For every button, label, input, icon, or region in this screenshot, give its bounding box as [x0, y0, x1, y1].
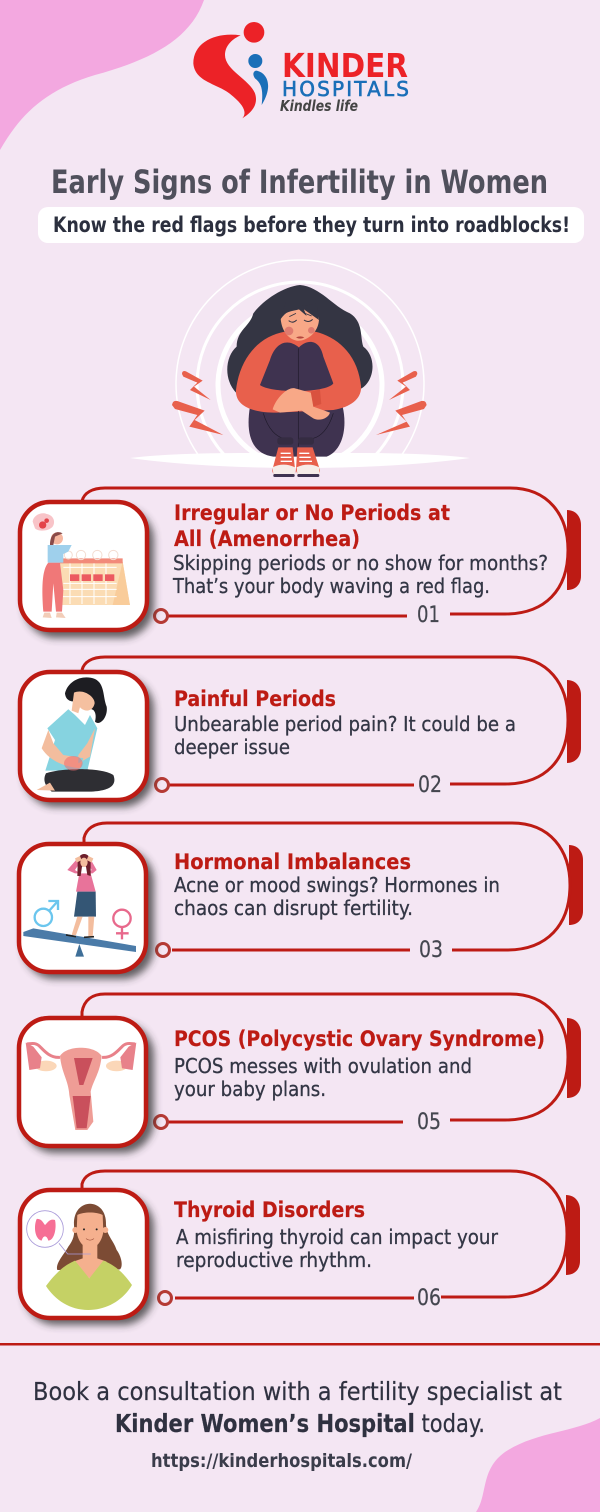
body line 1: Skipping periods or no show for months? [173, 551, 548, 575]
heading: Hormonal Imbalances [174, 850, 411, 874]
decorative blob: bottom right [476, 1418, 600, 1512]
panel: thyroid disorders [20, 1171, 580, 1325]
body line 1: Acne or mood swings? Hormones in [174, 873, 500, 897]
icon card [20, 672, 147, 800]
connector [82, 488, 568, 616]
body line 1: PCOS messes with ovulation and [174, 1054, 472, 1078]
hero illustration: distressed woman [131, 259, 468, 477]
heading: Irregular or No Periods at [174, 501, 450, 525]
side tab [569, 845, 583, 925]
body line 2: your baby plans. [174, 1077, 326, 1101]
icon card [19, 1018, 146, 1146]
panel: PCOS [19, 994, 581, 1153]
body line 2: That’s your body waving a red flag. [172, 574, 490, 598]
side tab [567, 680, 581, 763]
logo wordmark: KINDER [282, 46, 408, 85]
icon: hormonal balance seesaw [23, 854, 136, 957]
card shadow [24, 1195, 154, 1325]
connector [84, 823, 570, 950]
card shadow [24, 508, 154, 638]
icon card [20, 1190, 147, 1318]
body line 1: Unbearable period pain? It could be a [174, 712, 516, 736]
connector node [154, 1116, 168, 1128]
icon card [20, 502, 147, 630]
connector node [154, 610, 168, 622]
body line 2: chaos can disrupt fertility. [174, 896, 413, 920]
footer url: https://kinderhospitals.com/ [151, 1450, 412, 1472]
footer call to action line 2: Kinder Women’s Hospital today. [115, 1409, 485, 1438]
body line 1: A misfiring thyroid can impact your [176, 1225, 499, 1249]
number: 02 [418, 773, 442, 798]
logo tagline: Kindles life [280, 97, 358, 115]
card shadow [23, 849, 154, 979]
panel: irregular or no periods [20, 488, 581, 638]
icon: woman with thyroid [27, 1204, 132, 1310]
subtitle pill [38, 207, 584, 243]
logo mark [193, 22, 268, 118]
card shadow [23, 1023, 154, 1153]
heading: PCOS (Polycystic Ovary Syndrome) [174, 1027, 545, 1051]
side tab [567, 1018, 581, 1098]
body line 2: deeper issue [174, 735, 290, 759]
side tab [566, 1195, 580, 1275]
footer call to action line 1: Book a consultation with a fertility specialist at [33, 1377, 562, 1406]
connector node [156, 778, 168, 792]
icon: woman with calendar [33, 513, 130, 618]
number: 06 [417, 1286, 441, 1311]
number: 01 [417, 603, 440, 628]
logo [193, 22, 409, 118]
card shadow [24, 677, 154, 807]
heading: Painful Periods [174, 687, 336, 711]
connector [82, 657, 568, 785]
icon card [19, 844, 146, 972]
icon: uterus [26, 1043, 136, 1130]
heading line 2: All (Amenorrhea) [174, 527, 360, 551]
decorative blob: top left [0, 0, 204, 150]
icon: woman in pain [37, 677, 114, 792]
number: 05 [417, 1110, 441, 1135]
footer divider [0, 1343, 600, 1346]
connector node [156, 944, 170, 956]
side tab [567, 510, 581, 590]
heading: Thyroid Disorders [174, 1198, 365, 1222]
connector [82, 994, 568, 1122]
connector node [158, 1292, 172, 1304]
logo sub-wordmark: HOSPITALS [282, 77, 409, 101]
number: 03 [419, 938, 443, 963]
panel: hormonal imbalances [19, 823, 583, 979]
panel: painful periods [20, 657, 581, 807]
connector [82, 1171, 567, 1298]
body line 2: reproductive rhythm. [176, 1248, 372, 1272]
